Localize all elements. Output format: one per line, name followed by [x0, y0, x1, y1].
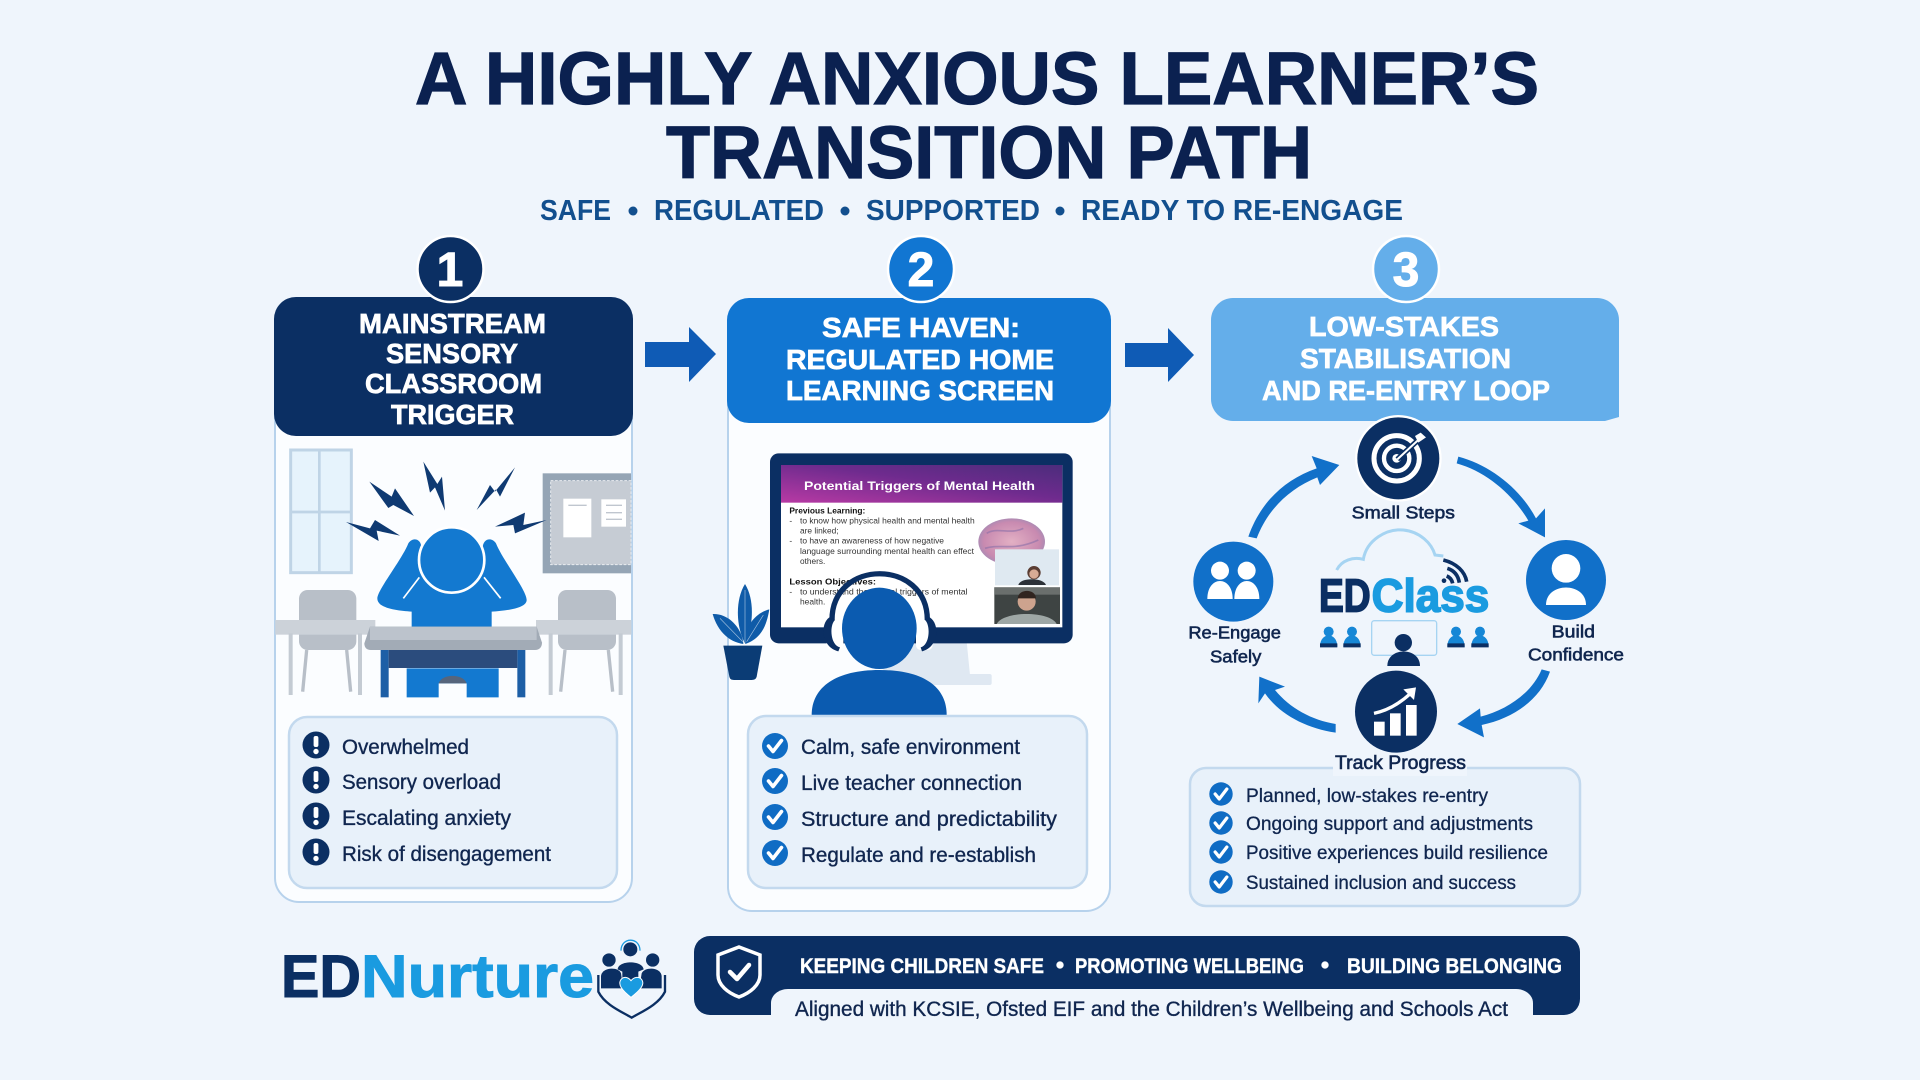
lesson slide: health.	[800, 597, 825, 607]
home learning illustration	[713, 453, 1073, 715]
build confidence node	[1526, 540, 1624, 665]
title	[415, 37, 1539, 194]
learner figure	[377, 527, 527, 697]
panel 1 symptom list	[289, 717, 617, 888]
panel 1 symptom list: Risk of disengagement	[342, 843, 551, 866]
track progress node	[1355, 671, 1437, 753]
potted plant	[713, 584, 769, 680]
panel 1 body	[275, 320, 632, 902]
lesson slide: -	[789, 587, 792, 597]
stress lightning bolts	[346, 462, 547, 541]
number badge 2: 2	[908, 244, 934, 297]
lesson slide: Previous Learning:	[789, 505, 865, 515]
panel 1 header	[274, 297, 633, 436]
icon: shield check	[718, 947, 760, 997]
panel 3 outcome list	[1190, 768, 1580, 906]
loop arrows	[1248, 456, 1550, 737]
panel 3 outcome list: Ongoing support and adjustments	[1246, 814, 1533, 835]
EDNurture logo: Nurture	[361, 943, 594, 1010]
lesson slide: Lesson Objectives:	[789, 576, 876, 586]
panel 2 body	[728, 320, 1110, 911]
monitor stand	[883, 642, 992, 685]
lesson slide: others.	[800, 556, 825, 566]
panel 1 symptom list: Overwhelmed	[342, 736, 469, 759]
panel 2 header: LEARNING SCREEN	[786, 375, 1054, 406]
number badge 3	[1373, 236, 1439, 302]
panel 2 benefit list: Regulate and re-establish	[801, 844, 1036, 867]
lesson slide: -	[789, 516, 792, 526]
learner with headset	[812, 574, 947, 715]
title: TRANSITION PATH	[666, 111, 1312, 194]
panel 2 header: REGULATED HOME	[786, 344, 1054, 375]
build confidence node: Build	[1552, 621, 1595, 641]
subtitle: READY TO RE-ENGAGE	[1081, 195, 1403, 227]
panel 1 header: CLASSROOM	[365, 368, 542, 399]
panel 1 symptom list: Escalating anxiety	[342, 807, 511, 830]
number badge 1	[418, 236, 484, 302]
panel 2 header	[727, 298, 1111, 423]
lesson slide: to know how physical health and mental health	[800, 516, 975, 526]
EDClass logo: ED	[1319, 570, 1371, 622]
side desks and chairs	[275, 590, 631, 695]
panel 2 benefit list: Live teacher connection	[801, 772, 1022, 795]
re-engage safely node	[1188, 542, 1281, 666]
video call tiles	[994, 549, 1060, 624]
banner text: KEEPING CHILDREN SAFE	[800, 954, 1044, 978]
re-entry loop diagram	[1188, 415, 1624, 753]
panel 2 benefit list: Structure and predictability	[801, 808, 1058, 831]
panel 3: stabilisation and re-entry loop	[1188, 236, 1624, 906]
lesson slide: Potential Triggers of Mental Health	[804, 479, 1035, 493]
panel 3 header: LOW-STAKES	[1309, 311, 1499, 342]
panel 1 header: SENSORY	[386, 338, 518, 369]
lesson slide: language surrounding mental health can effect	[800, 546, 975, 556]
panel 3 header: AND RE-ENTRY LOOP	[1262, 375, 1550, 406]
EDClass logo	[1319, 530, 1489, 666]
classroom illustration: anxious learner at desk	[275, 450, 631, 697]
banner text: BUILDING BELONGING	[1347, 954, 1562, 978]
number badge 2	[888, 236, 954, 302]
panel 2: safe haven	[713, 236, 1111, 911]
subtitle	[540, 195, 1403, 227]
small steps node: Small Steps	[1352, 502, 1455, 522]
lesson slide: to have an awareness of how negative	[800, 536, 944, 546]
lesson slide: -	[789, 536, 792, 546]
re-engage safely node: Re-Engage	[1188, 623, 1281, 643]
track progress label: Track Progress	[1335, 753, 1466, 774]
panel 1 header: TRIGGER	[391, 399, 514, 430]
footer banner	[694, 936, 1580, 1024]
panel 3 header	[1211, 298, 1619, 421]
subtitle: SUPPORTED	[866, 195, 1040, 227]
panel 3 outcome list: Sustained inclusion and success	[1246, 873, 1516, 894]
panel 2 header: SAFE HAVEN:	[822, 312, 1020, 343]
footer tab	[771, 989, 1533, 1024]
lesson slide: to understand the mental triggers of mental	[800, 587, 968, 597]
icon: family and heart shield	[598, 940, 665, 1018]
arrow: step 1 to step 2	[645, 327, 716, 382]
EDClass logo: Class	[1372, 570, 1489, 622]
lesson slide: are linked;	[800, 526, 839, 536]
lesson slide	[781, 465, 1062, 627]
EDNurture logo	[281, 940, 665, 1018]
notice board	[543, 473, 631, 573]
re-engage safely node: Safely	[1210, 646, 1261, 666]
panel 1: mainstream classroom trigger	[274, 236, 633, 902]
EDNurture logo: ED	[281, 943, 361, 1010]
monitor frame	[770, 453, 1073, 643]
panel 1 symptom list: Sensory overload	[342, 771, 501, 794]
title: A HIGHLY ANXIOUS LEARNER’S	[415, 37, 1539, 120]
panel 3 outcome list: Planned, low-stakes re-entry	[1246, 786, 1488, 807]
banner text: PROMOTING WELLBEING	[1075, 954, 1304, 978]
panel 3 outcome list: Positive experiences build resilience	[1246, 843, 1548, 864]
banner text	[800, 954, 1562, 978]
subtitle: SAFE	[540, 195, 611, 227]
panel 2 benefit list	[748, 716, 1087, 888]
window	[291, 450, 351, 573]
panel 3 header: STABILISATION	[1300, 343, 1511, 374]
build confidence node: Confidence	[1528, 645, 1624, 665]
panel 1 header: MAINSTREAM	[359, 308, 546, 339]
alignment statement: Aligned with KCSIE, Ofsted EIF and the Children’s Wellbeing and Schools Act	[795, 998, 1508, 1021]
subtitle: REGULATED	[654, 195, 824, 227]
number badge 1: 1	[437, 244, 463, 297]
panel 2 benefit list: Calm, safe environment	[801, 736, 1020, 759]
central desk	[364, 627, 542, 697]
number badge 3: 3	[1393, 244, 1419, 297]
arrow: step 2 to step 3	[1125, 328, 1194, 382]
small steps node	[1352, 415, 1455, 522]
